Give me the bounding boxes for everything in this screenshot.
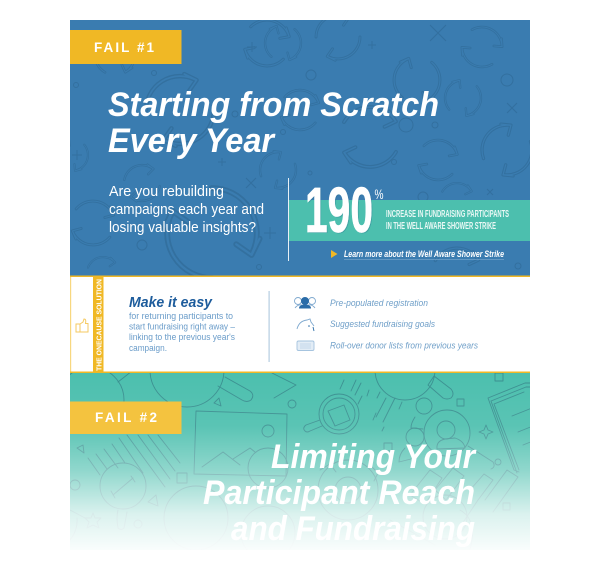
title: and Fundraising <box>231 510 475 548</box>
stat description <box>386 208 509 232</box>
white fade overlay <box>70 373 530 550</box>
title <box>108 86 439 160</box>
list item: registration <box>294 297 428 308</box>
question text <box>109 183 264 236</box>
fail 1 badge <box>70 30 182 64</box>
description: campaign. <box>129 343 167 353</box>
title: Participant Reach <box>203 474 475 512</box>
left border <box>70 277 71 372</box>
list item: goals <box>297 319 435 331</box>
list item: registration: Pre-populated registration <box>330 298 428 308</box>
infographic <box>70 20 530 548</box>
title: Limiting Your <box>271 438 477 476</box>
panel: fail 1 <box>70 20 530 277</box>
stat: 190 percent: 190 <box>305 174 373 246</box>
icon: list <box>297 341 314 350</box>
stat description: IN THE WELL AWARE SHOWER STRIKE <box>386 220 496 232</box>
icon: thumbs up <box>76 319 88 332</box>
teal background <box>70 373 530 550</box>
title: Every Year <box>108 122 276 160</box>
title: Starting from Scratch <box>108 86 439 124</box>
vertical divider <box>288 178 289 261</box>
fundraising line-art background pattern <box>70 373 530 520</box>
description: for returning participants to <box>129 311 233 321</box>
description: start fundraising right away – <box>129 322 235 332</box>
vertical solution tab: THE ONECAUSE SOLUTION <box>94 279 104 371</box>
description: linking to the previous year's <box>129 332 235 342</box>
question text: Are you rebuilding <box>109 183 224 200</box>
stat: 190 percent: 190 <box>306 175 374 247</box>
stat band <box>289 200 530 241</box>
fail 1 badge: FAIL #1 <box>94 40 154 55</box>
recycling arrows background pattern <box>70 20 530 276</box>
question text: losing valuable insights? <box>109 219 256 236</box>
fail 2 badge <box>70 402 182 434</box>
description <box>129 311 235 353</box>
stat: 190 percent: % <box>374 186 384 202</box>
question text: campaigns each year and <box>109 201 264 218</box>
fail 2 badge: FAIL #2 <box>95 410 157 425</box>
heading: Make it easy <box>129 294 213 311</box>
white background <box>70 277 530 372</box>
panel: fail 2 <box>70 373 530 548</box>
icon: gauge <box>297 319 314 331</box>
list item: donor lists: Roll-over donor lists from previous years <box>330 340 478 350</box>
yellow bottom rule <box>70 276 530 277</box>
vertical divider <box>268 291 270 362</box>
yellow bottom rule <box>70 372 530 373</box>
blue background <box>70 20 530 276</box>
learn more link: Learn more about the Well Aware Shower Strike <box>344 249 504 259</box>
list item: goals: Suggested fundraising goals <box>330 319 435 329</box>
title <box>203 438 477 548</box>
icon: people <box>294 297 316 308</box>
panel: the onecause solution <box>70 277 530 373</box>
